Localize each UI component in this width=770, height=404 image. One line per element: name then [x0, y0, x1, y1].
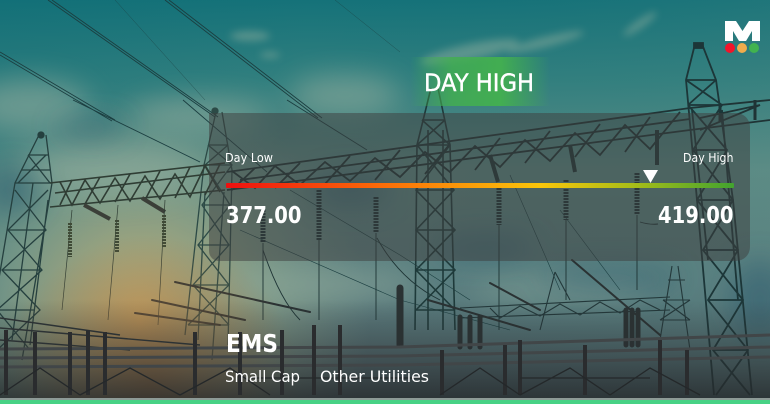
- heading: day high tag: DAY HIGH: [424, 69, 534, 97]
- logo: [725, 21, 760, 53]
- range bar: [226, 183, 734, 188]
- label: day high: Day High: [683, 151, 734, 165]
- stock category labels: [225, 367, 429, 386]
- overhead wires: [0, 0, 620, 330]
- tower: centre: [415, 88, 455, 330]
- busbars and ground equipment: [0, 318, 770, 395]
- bottom accent strip: [0, 398, 770, 404]
- breaker arms: [135, 260, 660, 347]
- stock ticker: EMS: [226, 329, 278, 358]
- panel: day range: [209, 113, 750, 261]
- heading: day high tag: [410, 57, 550, 106]
- value: day low price: 377.00: [226, 203, 302, 229]
- stock category labels: Small Cap: [225, 367, 300, 386]
- truss: main crossarm: [227, 100, 770, 190]
- distant substation gantry: [460, 266, 690, 350]
- label: day low: Day Low: [225, 151, 273, 165]
- tower: far left: [0, 132, 52, 360]
- stock category labels: Other Utilities: [320, 367, 429, 386]
- tower: right: [686, 43, 752, 395]
- hanging insulators: [263, 130, 658, 330]
- tower: second left: [185, 108, 232, 360]
- marker: current price: [643, 170, 658, 183]
- ground haze: [0, 235, 770, 400]
- truss: left crossarm: [50, 163, 225, 325]
- value: day high price: 419.00: [658, 203, 734, 229]
